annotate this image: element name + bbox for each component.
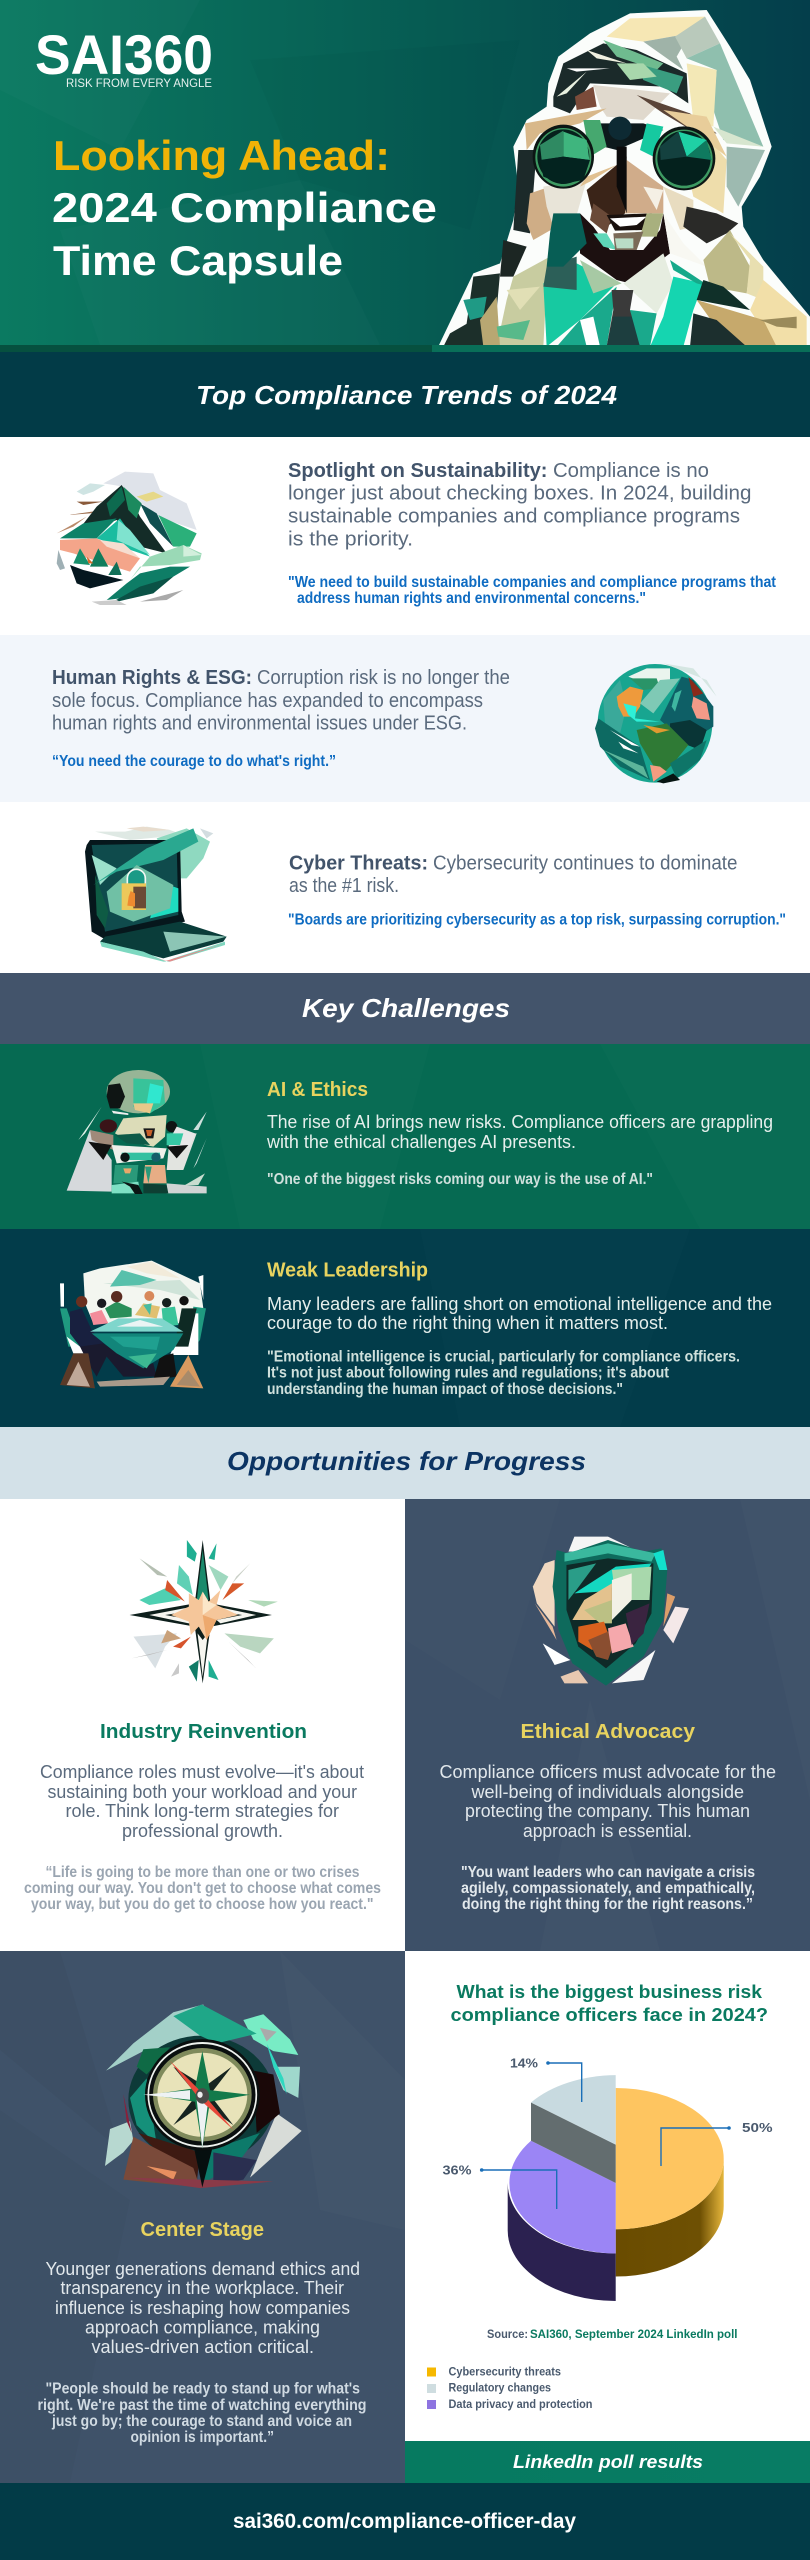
text: ethical advocacy: Compliance officers must advocate for the [440,1762,776,1782]
illustration: man with binoculars [435,10,810,353]
icon: shield [533,1537,689,1686]
text: human rights and ESG [52,667,510,734]
callout: 14 percent [510,2056,582,2102]
panel: human rights and ESG [0,635,810,802]
text: center stage: values-driven action critical. [92,2337,314,2357]
quote: sustainability: address human rights and environmental concerns." [297,590,646,607]
text: center stage: "People should be ready to stand up for what's [46,2380,360,2398]
text: AI and ethics: AI & Ethics [267,1079,368,1101]
text: industry reinvention: “Life is going to be more than one or two crises [46,1864,360,1881]
text: cyber threats [289,852,738,897]
chart title: What is the biggest business risk [456,1982,763,2002]
text: center stage: opinion is important.” [130,2429,274,2446]
text: ethical advocacy: well-being of individuals alongside [470,1782,744,1802]
panel: weak leadership [0,1229,810,1427]
text: AI and ethics: The rise of AI brings new risks. Compliance officers are grappling [267,1112,773,1132]
text: industry reinvention: Industry Reinvention [100,1721,307,1743]
text: human rights and ESG: human rights and environmental issues under ESG. [52,712,467,734]
text: weak leadership: Weak Leadership [267,1260,428,1282]
text: industry reinvention: your way, but you do get to choose how you react." [31,1896,374,1913]
text: weak leadership: "Emotional intelligence is crucial, particularly for compliance officers. [267,1348,740,1366]
icon: mountain [57,472,202,605]
text: weak leadership: understanding the human impact of those decisions." [267,1381,623,1398]
text: spotlight on sustainability [288,460,752,550]
legend: Data privacy and protection [448,2399,592,2411]
text: human rights and ESG: Corruption risk is no longer the [257,667,510,689]
text: industry reinvention: Compliance roles must evolve—it's about [40,1762,364,1782]
text: AI and ethics: with the ethical challenges AI presents. [266,1132,576,1152]
panel: hero header [0,0,810,353]
text: center stage: Center Stage [140,2219,264,2241]
panel: industry reinvention [0,1499,405,1951]
callout: 14 percent: 14% [510,2056,538,2070]
callout: 50 percent [661,2120,773,2166]
text: spotlight on sustainability: sustainable companies and compliance programs [288,506,740,528]
text: spotlight on sustainability: is the priority. [288,528,413,550]
source note: Source: [487,2329,528,2341]
text: center stage [38,2219,366,2446]
text: cyber threats: Cyber Threats: [289,852,428,874]
text: cyber threats: Cybersecurity continues to dominate [433,852,738,874]
panel: LinkedIn poll chart [405,1951,810,2483]
text: weak leadership [267,1260,772,1398]
text: AI and ethics [266,1079,773,1188]
text: ethical advocacy [440,1721,776,1913]
text: center stage: influence is reshaping how companies [55,2298,350,2318]
text: weak leadership: Many leaders are falling short on emotional intelligence and the [267,1294,772,1314]
title: Looking Ahead: [53,132,390,179]
quote: courage: “You need the courage to do what's right.” [52,753,336,770]
text: spotlight on sustainability: longer just about checking boxes. In 2024, building [288,482,752,504]
text: ethical advocacy: "You want leaders who can navigate a crisis [461,1864,755,1881]
title: 2024 Compliance [52,184,437,231]
banner: top compliance trends [0,352,810,437]
panel: center stage [0,1951,405,2483]
title: Time Capsule [53,237,343,284]
text: center stage: just go by; the courage to stand and voice an [51,2413,352,2430]
text: industry reinvention: sustaining both your workload and your [48,1782,357,1802]
text: industry reinvention: coming our way. You don't get to choose what comes [24,1880,381,1897]
chart title [450,1982,768,2025]
icon: leadership meeting [60,1261,206,1388]
banner: LinkedIn poll results [405,2441,810,2483]
title [52,132,437,284]
banner: key challenges [0,973,810,1044]
text: industry reinvention: role. Think long-term strategies for [66,1801,339,1821]
legend: Cybersecurity threats [448,2366,561,2378]
banner: opportunities for progress [0,1427,810,1499]
callout: 50 percent: 50% [742,2120,773,2135]
panel: cyber threats [0,802,810,973]
text: human rights and ESG: sole focus. Compliance has expanded to encompass [52,690,483,712]
icon: robot [67,1070,207,1194]
text: ethical advocacy: agilely, compassionately, and empathically, [461,1880,755,1897]
banner: top compliance trends: Top Compliance Trends of 2024 [196,380,618,410]
text: weak leadership: It's not just about following rules and regulations; it's about [267,1364,669,1382]
text: spotlight on sustainability: Spotlight on Sustainability: [288,460,548,482]
icon: laptop with padlock [85,827,227,962]
footer [0,2483,810,2560]
text: ethical advocacy: protecting the company. This human [465,1801,750,1821]
quote: sustainability [288,574,776,607]
legend: Regulatory changes [448,2382,551,2394]
banner: LinkedIn poll results: LinkedIn poll results [513,2452,703,2472]
banner: key challenges: Key Challenges [302,993,510,1023]
legend [427,2366,592,2411]
text: center stage: transparency in the workplace. Their [60,2278,344,2298]
text: human rights and ESG: Human Rights & ESG: [52,667,252,689]
text: cyber threats: as the #1 risk. [289,875,399,897]
panel: spotlight on sustainability [0,437,810,635]
text: AI and ethics: "One of the biggest risks coming our way is the use of AI." [267,1171,653,1188]
logo: SAI360 [35,23,213,86]
icon: globe [595,663,717,783]
text: ethical advocacy: approach is essential. [523,1821,692,1841]
icon: compass [105,2004,302,2188]
text: center stage: right. We're past the time of watching everything [38,2397,366,2414]
icon: star burst [130,1540,278,1683]
pie chart [508,2075,724,2301]
quote: sustainability: "We need to build sustainable companies and compliance programs that [288,574,776,591]
text: center stage: Younger generations demand ethics and [46,2259,360,2279]
panel: AI and ethics [0,1044,810,1229]
text: industry reinvention: professional growth. [122,1821,283,1841]
footer: sai360.com/compliance-officer-day [233,2510,576,2533]
chart title: compliance officers face in 2024? [450,2005,768,2025]
panel: ethical advocacy [405,1499,810,1951]
callout: 36 percent [442,2162,557,2209]
text: spotlight on sustainability: Compliance is no [553,460,709,482]
logo: RISK FROM EVERY ANGLE [66,78,212,90]
callout: 36 percent: 36% [442,2162,472,2178]
text: ethical advocacy: Ethical Advocacy [520,1721,696,1743]
text: industry reinvention [24,1721,381,1913]
text: ethical advocacy: doing the right thing for the right reasons.” [462,1896,753,1913]
source note: SAI360, September 2024 LinkedIn poll [530,2329,738,2341]
text: weak leadership: courage to do the right thing when it matters most. [267,1313,668,1333]
text: center stage: approach compliance, making [85,2318,320,2338]
banner: opportunities for progress: Opportunities for Progress [227,1446,586,1476]
